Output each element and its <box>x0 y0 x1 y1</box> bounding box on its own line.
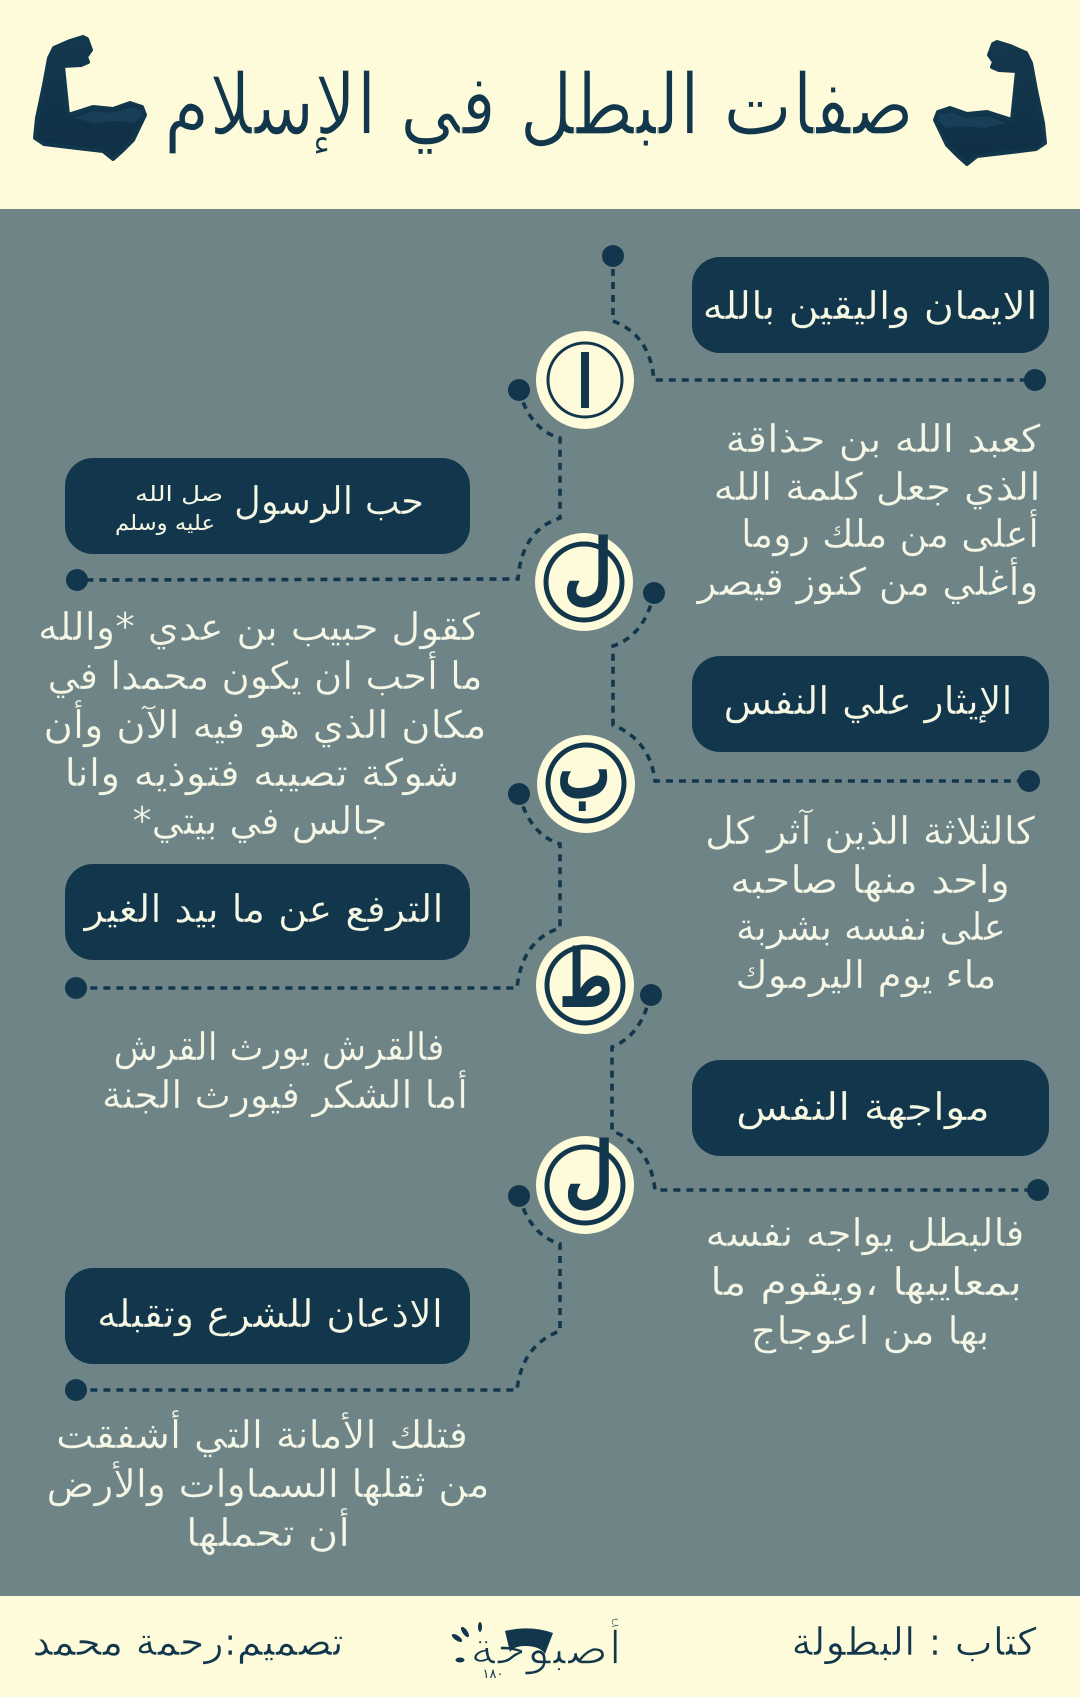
timeline connectors <box>76 256 1038 1390</box>
text: facing the self description <box>706 1211 1024 1354</box>
text: submission description: أن تحملها <box>186 1508 350 1556</box>
text: submission description: فتلك الأمانة التي أشفقت <box>56 1410 468 1457</box>
connector end dots <box>65 245 1049 1401</box>
footer text: designer: تصميم:رحمة محمد <box>32 1620 344 1664</box>
text: faith description: وأغلي من كنوز قيصر <box>695 557 1038 605</box>
text: love of the Prophet description <box>38 605 486 843</box>
text: love of the Prophet description: شوكة تصيبه فتوذيه وانا <box>64 751 460 796</box>
badge: letter ta: ط <box>560 934 612 1023</box>
text: facing the self description: فالبطل يواجه نفسه <box>706 1211 1024 1256</box>
text: faith description <box>695 417 1041 605</box>
header band <box>0 0 1080 209</box>
text: facing the self description: بمعايبها ،ويقوم ما <box>710 1260 1022 1305</box>
pill: rising above others' possessions: الترفع عن ما بيد الغير <box>82 887 444 932</box>
text: altruism description: على نفسه بشربة <box>736 905 1006 950</box>
text: faith description: الذي جعل كلمة الله <box>714 465 1040 509</box>
text: altruism description: ماء يوم اليرموك <box>736 953 996 998</box>
text: facing the self description: بها من اعوجاج <box>750 1309 990 1354</box>
badge: letter ba: ب <box>558 725 610 814</box>
pill: faith <box>692 257 1049 353</box>
text: altruism description: كالثلاثة الذين آثر كل <box>705 808 1036 854</box>
badge: letter lam: ل <box>565 1126 613 1215</box>
pill: love of the Prophet: عليه وسلم <box>115 511 215 536</box>
badge: letter lam <box>536 1126 634 1234</box>
pill: altruism: الإيثار علي النفس <box>724 679 1012 724</box>
pill: facing the self: مواجهة النفس <box>736 1085 990 1130</box>
pill: faith: الايمان واليقين بالله <box>702 284 1038 329</box>
badge: letter lam: ل <box>564 523 612 612</box>
badge: letter ta <box>536 934 634 1034</box>
pill: facing the self <box>692 1060 1049 1156</box>
text: love of the Prophet description: ما أحب ان يكون محمدا في <box>48 651 482 699</box>
pill: altruism <box>692 656 1049 752</box>
title: صفات البطل في الإسلام <box>164 56 914 155</box>
text: rising above description: أما الشكر فيورث الجنة <box>102 1070 468 1118</box>
pill: submission to the law: الاذعان للشرع وتقبله <box>97 1292 443 1337</box>
text: love of the Prophet description: مكان الذي هو فيه الآن وأن <box>44 700 486 748</box>
footer band <box>0 1596 1080 1697</box>
text: altruism description <box>705 808 1036 998</box>
text: faith description: كعبد الله بن حذاقة <box>726 417 1041 462</box>
text: rising above description <box>102 1025 468 1118</box>
text: submission description <box>46 1410 490 1556</box>
pill: love of the Prophet: صل الله <box>135 482 223 506</box>
text: altruism description: واحد منها صاحبه <box>730 858 1010 903</box>
text: rising above description: فالقرش يورث القرش <box>114 1025 444 1070</box>
badge: letter ba <box>537 725 635 833</box>
icon: right flexed arm <box>935 42 1045 164</box>
badge: letter lam <box>535 523 633 631</box>
pill: love of the Prophet <box>65 458 470 554</box>
logo: ١٨٠ <box>483 1667 503 1682</box>
pill: submission to the law <box>65 1268 470 1364</box>
text: love of the Prophet description: جالس في بيتي* <box>132 799 388 843</box>
icon: left flexed arm <box>35 37 145 159</box>
footer text: book name: كتاب : البطولة <box>792 1620 1037 1665</box>
pill: love of the Prophet: حب الرسول <box>234 479 424 524</box>
text: love of the Prophet description: كقول حبيب بن عدي *والله <box>38 605 481 650</box>
badge: letter alif <box>536 331 634 429</box>
text: submission description: من ثقلها السماوات والأرض <box>46 1460 490 1507</box>
pill: rising above others' possessions <box>65 864 470 960</box>
text: faith description: أعلى من ملك روما <box>741 509 1039 557</box>
logo: أصبوحة <box>470 1618 622 1676</box>
